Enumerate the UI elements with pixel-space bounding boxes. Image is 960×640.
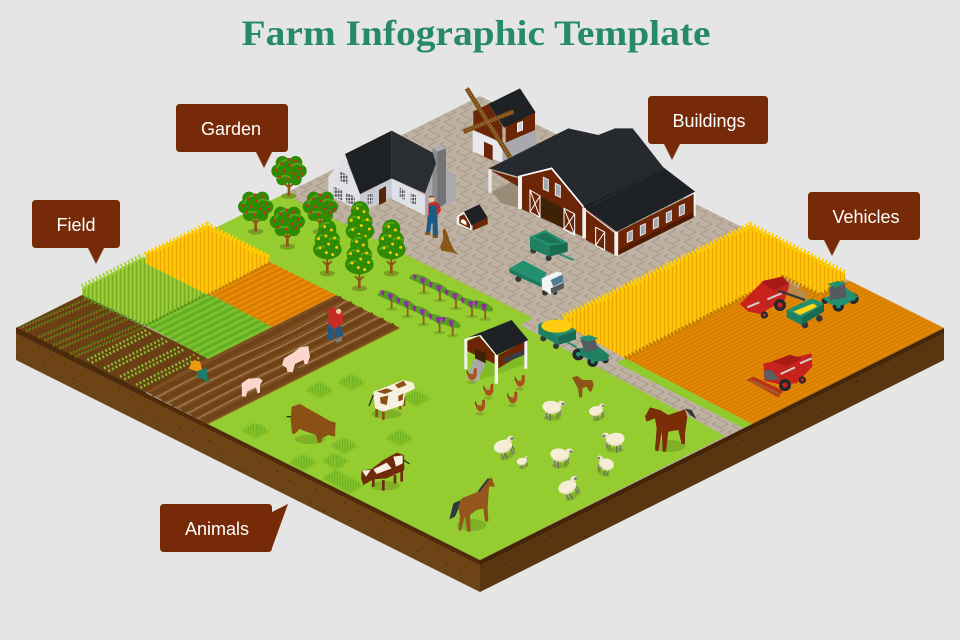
garden: grape vines — [378, 272, 495, 337]
cobblestone yard — [16, 96, 944, 560]
scene in 3x coordinates: buildings and yard — [328, 88, 696, 296]
spotted cow red and white — [361, 453, 409, 491]
pasture scene — [241, 320, 697, 532]
vehicle: green trailer — [530, 230, 573, 261]
callout: Garden — [176, 104, 288, 168]
combine harvester upper — [740, 277, 807, 319]
large yellow wheat field — [563, 225, 845, 358]
orchard: apple trees — [238, 156, 338, 250]
callout: Buildings — [648, 96, 768, 160]
callout: Animals — [160, 504, 288, 552]
isometric farm base — [16, 96, 944, 592]
grass strip beside road — [617, 358, 752, 428]
dog sitting — [440, 228, 459, 255]
sheep — [490, 399, 626, 504]
title: Farm Infographic Template — [242, 13, 711, 53]
building: large barn — [488, 128, 696, 256]
carrot rows — [20, 297, 144, 357]
soil side left — [16, 328, 480, 592]
vehicle: flatbed truck — [509, 260, 564, 296]
green tractor in field — [822, 281, 859, 312]
farmer with hoe — [326, 307, 343, 343]
large pig — [282, 346, 310, 373]
field: light green crop — [145, 293, 272, 359]
building: farmhouse — [328, 131, 456, 216]
brown cow — [287, 404, 336, 444]
callout: Field: Field — [56, 215, 96, 235]
people and pigs in the field — [189, 307, 343, 398]
vehicles on the right — [538, 277, 859, 397]
small pig — [242, 378, 263, 398]
building: dog house — [457, 204, 488, 231]
field: ploughed soil with furrows — [146, 295, 400, 424]
callout: Vehicles: Vehicles — [832, 207, 900, 227]
field: yellow wheat — [145, 225, 270, 295]
brown dog — [572, 376, 594, 397]
brown horse — [449, 477, 495, 532]
large orange harvested field — [625, 281, 944, 424]
building: windmill — [463, 88, 536, 163]
callout: Vehicles — [808, 192, 920, 256]
field: harvested orange strip — [208, 262, 336, 327]
field: green wheat — [82, 256, 207, 326]
combine harvester lower — [747, 353, 812, 397]
garden and pasture grass — [208, 194, 725, 560]
spotted cow white and brown — [369, 380, 415, 420]
green tractor on road — [572, 335, 609, 367]
grain trailer on road — [538, 318, 577, 349]
seedling rows — [87, 330, 199, 388]
field: vegetable patch — [16, 295, 208, 393]
callout: Buildings: Buildings — [672, 111, 746, 131]
grain trailer in field — [787, 298, 824, 328]
chicken coop — [464, 320, 528, 384]
red horse — [645, 407, 697, 452]
orchard: pear trees — [313, 201, 406, 291]
callout: Garden: Garden — [201, 119, 261, 139]
soil side right — [480, 328, 944, 592]
grass tufts — [241, 372, 431, 494]
callout: Animals: Animals — [185, 519, 249, 539]
chickens — [467, 368, 525, 415]
kneeling woman — [189, 355, 209, 382]
callout: Field — [32, 200, 120, 264]
farmer in red shirt — [425, 196, 441, 238]
